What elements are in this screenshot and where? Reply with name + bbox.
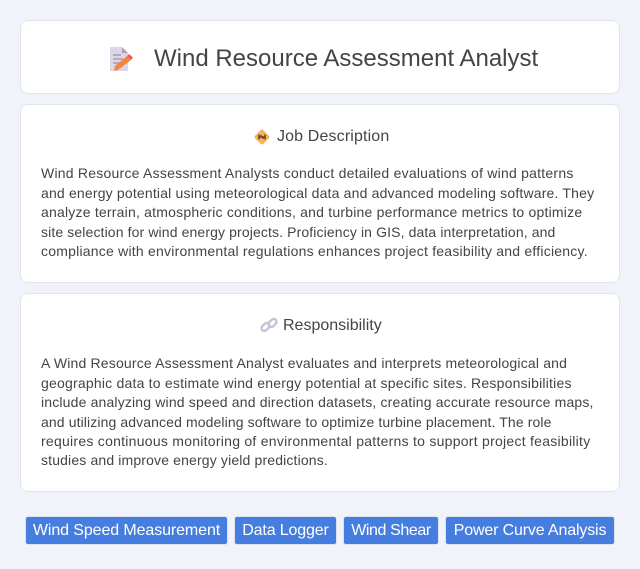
tag: wind shear [343,516,439,545]
icon: chain link [260,318,278,332]
panel: job description [20,104,620,283]
tag: wind shear: Wind Shear [351,522,431,539]
tag: power curve analysis: Power Curve Analysis [454,522,606,539]
text block: job description: site selection for wind energy projects. Proficiency in GIS, data interpretation, and [41,224,555,240]
text block: responsibility: and utilizing advanced modeling software to optimize turbine placement. The role [41,414,552,430]
text block: job description [41,165,594,259]
panel: title card [20,20,620,94]
text block: responsibility: studies and improve energy yield predictions. [41,452,328,468]
panel: responsibility [20,293,620,492]
tag: wind speed measurement: Wind Speed Measurement [33,522,220,539]
text block: job description: compliance with environmental regulations enhances project feasibility and efficiency. [41,243,588,259]
text block: responsibility: A Wind Resource Assessment Analyst evaluates and interprets meteorological and [41,355,567,371]
text block: responsibility [41,355,594,468]
text block: job description: and energy potential using meteorological data and advanced modeling software. They [41,185,594,201]
text block: responsibility: geographic data to estimate wind energy potential at specific sites. Responsibilities [41,375,572,391]
tag: data logger [234,516,337,545]
text block: job description: analyze terrain, atmospheric conditions, and turbine performance metrics to optimize [41,204,582,220]
title: Wind Resource Assessment Analyst [154,45,538,72]
text block: job description: Wind Resource Assessment Analysts conduct detailed evaluations of wind patterns [41,165,574,181]
heading: job description: Job Description [277,128,389,145]
heading: responsibility: Responsibility [283,317,382,334]
icon: road sign diamond [254,130,270,144]
tag: data logger: Data Logger [242,522,329,539]
icon: document with pencil [110,47,133,71]
tag: power curve analysis [445,516,615,545]
tag: wind speed measurement [25,516,228,545]
text block: responsibility: requires continuous monitoring of environmental patterns to support project feasibility [41,433,590,449]
text block: responsibility: include analyzing wind speed and direction datasets, creating accurate resource maps, [41,394,594,410]
